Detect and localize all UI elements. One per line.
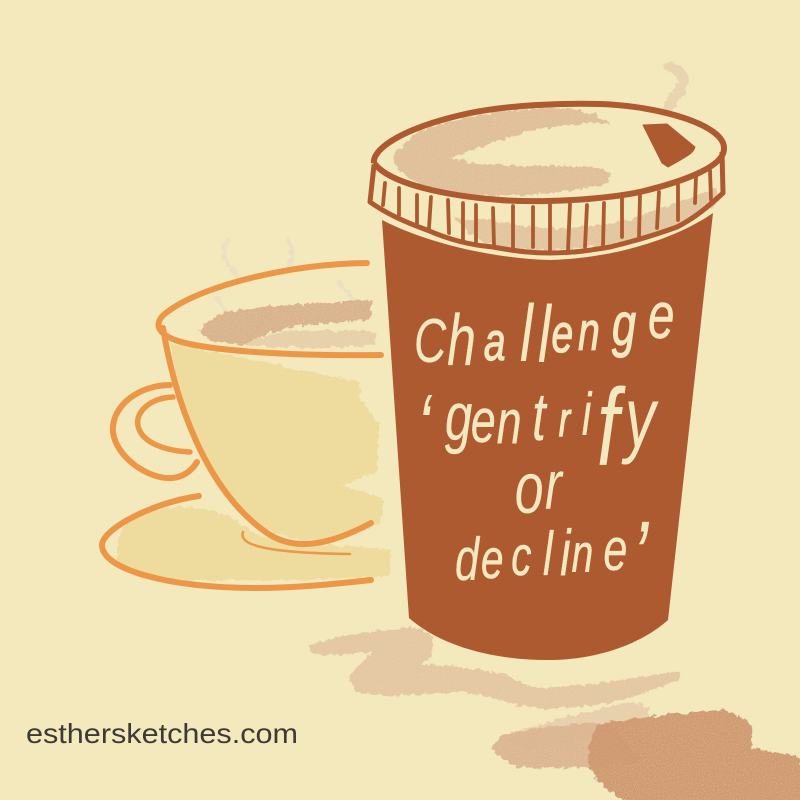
- line: decline: l: [543, 520, 554, 589]
- line: decline: i: [560, 518, 572, 590]
- saucer lines: [102, 496, 371, 588]
- line: Challenge: a: [484, 311, 505, 371]
- spilled coffee wash lower: [492, 702, 800, 800]
- lid rim fill: [370, 150, 723, 253]
- line: gentrify: ‘: [417, 376, 433, 477]
- teacup: [102, 263, 392, 588]
- line: gentrify: r: [559, 392, 572, 446]
- spilled coffee wash upper: [307, 627, 682, 709]
- dark wash: [588, 710, 800, 800]
- line: Challenge: n: [578, 301, 600, 361]
- pale wash: [500, 702, 650, 748]
- coffee surface dark wash: [200, 300, 372, 345]
- line: Challenge: l: [538, 289, 553, 379]
- line: decline: e: [603, 517, 627, 584]
- line: Challenge: l: [520, 288, 535, 378]
- line: decline: e: [481, 529, 503, 591]
- line: gentrify: n: [497, 388, 522, 457]
- line: Challenge: g: [612, 292, 636, 359]
- cup side: [163, 328, 371, 544]
- line: or: r: [545, 446, 564, 524]
- line: Challenge: e: [552, 303, 573, 363]
- saucer yellow wash: [117, 507, 392, 580]
- line: gentrify: g: [445, 378, 472, 455]
- line: Challenge: e: [648, 279, 674, 353]
- cup rim: [159, 263, 381, 355]
- lid top wash: [393, 108, 610, 196]
- line: gentrify: i: [582, 382, 593, 449]
- lid rim wash: [453, 188, 720, 250]
- cup handle: [113, 385, 197, 478]
- lid top outline: [374, 104, 724, 201]
- takeaway cup: [370, 104, 724, 660]
- steam from takeaway cup: [666, 67, 683, 110]
- line: Challenge: C: [414, 307, 447, 376]
- lid ribs: [383, 170, 711, 252]
- cup body yellow wash: [170, 343, 383, 541]
- line: decline: c: [511, 526, 531, 588]
- line: decline: ’: [632, 501, 650, 613]
- line: gentrify: f: [597, 366, 626, 489]
- mid wash: [492, 722, 640, 768]
- coffee surface light wash: [243, 330, 375, 347]
- line: gentrify: e: [471, 387, 496, 456]
- sip opening: [643, 124, 695, 167]
- line: decline: d: [455, 527, 481, 594]
- line: gentrify: t: [532, 378, 548, 455]
- steam from teacup: [217, 240, 354, 312]
- line: decline: n: [572, 523, 593, 583]
- line: gentrify: y: [621, 370, 659, 465]
- cup text: [414, 279, 674, 613]
- line: or: o: [515, 449, 544, 529]
- cup body: [382, 213, 713, 660]
- website credit: esthersketches.com: [26, 718, 298, 749]
- line: Challenge: h: [447, 301, 476, 381]
- lid rim outline: [370, 152, 723, 253]
